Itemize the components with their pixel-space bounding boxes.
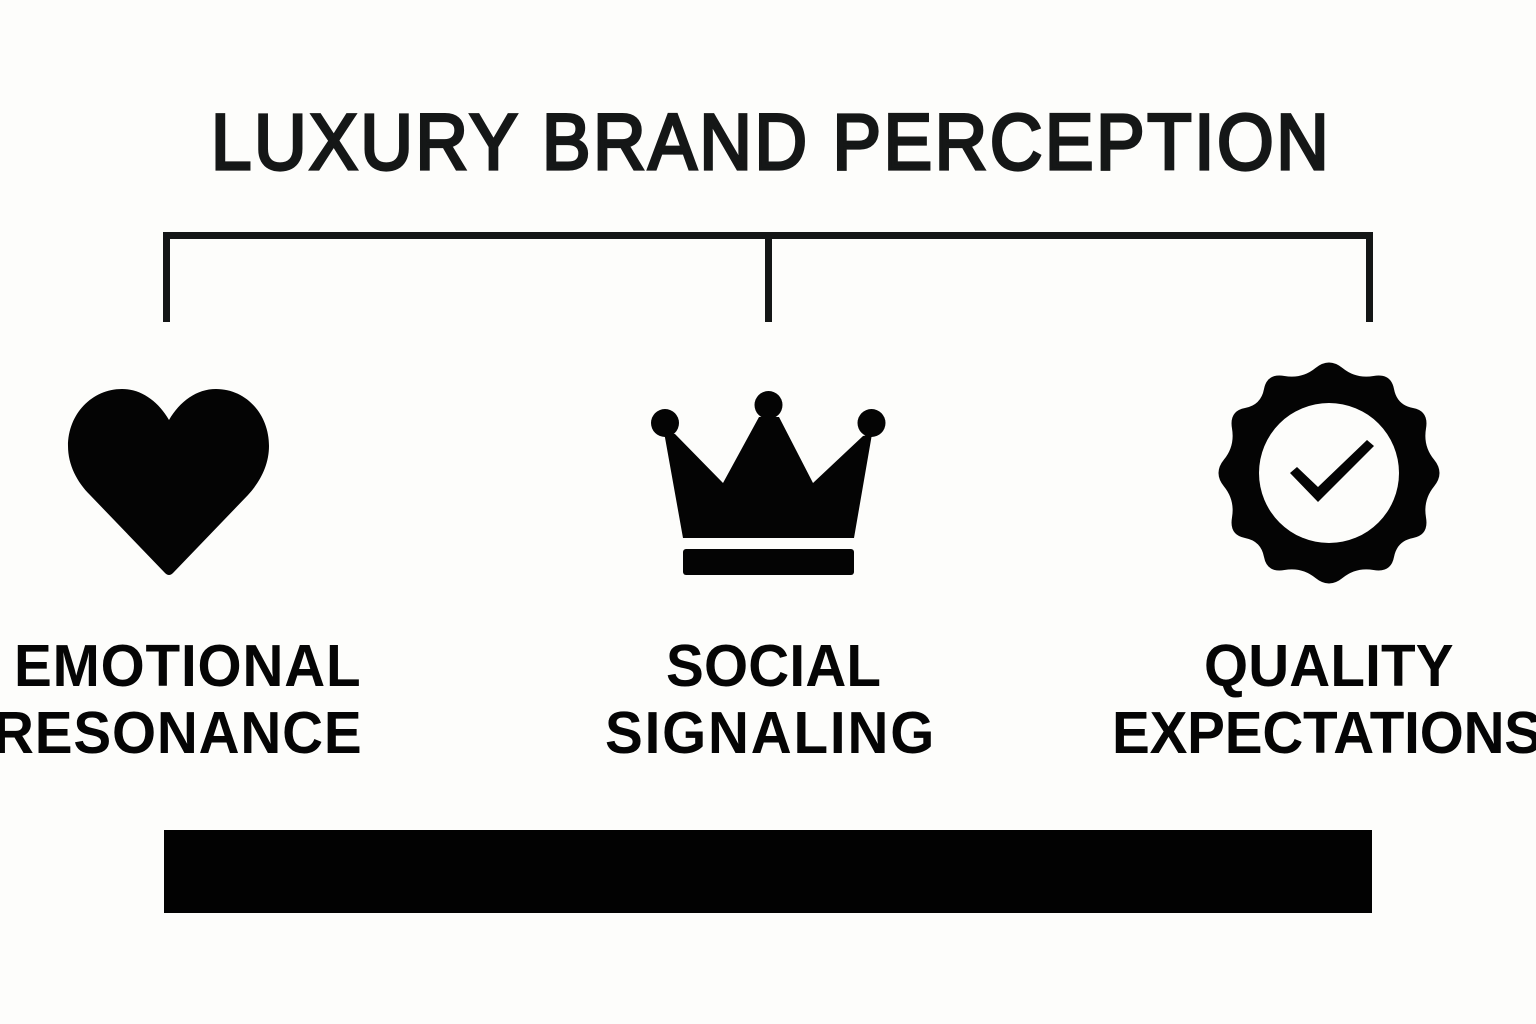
bracket connector bbox=[163, 232, 1373, 322]
title: LUXURY BRAND PERCEPTION bbox=[211, 98, 1329, 187]
icon: crown bbox=[651, 391, 886, 575]
label: social signaling: SOCIAL bbox=[666, 634, 881, 699]
label: social signaling bbox=[605, 634, 934, 766]
icon: quality badge with check bbox=[1218, 362, 1440, 584]
label: social signaling: SIGNALING bbox=[605, 701, 934, 766]
icon: heart bbox=[68, 389, 269, 575]
label: emotional resonance: EMOTIONAL bbox=[14, 634, 361, 699]
label: emotional resonance: RESONANCE bbox=[0, 701, 362, 766]
label: quality expectations bbox=[1112, 634, 1536, 766]
label: quality expectations: EXPECTATIONS bbox=[1112, 701, 1536, 766]
solid black bar bbox=[164, 830, 1372, 913]
label: emotional resonance bbox=[0, 634, 362, 766]
label: quality expectations: QUALITY bbox=[1204, 634, 1454, 699]
